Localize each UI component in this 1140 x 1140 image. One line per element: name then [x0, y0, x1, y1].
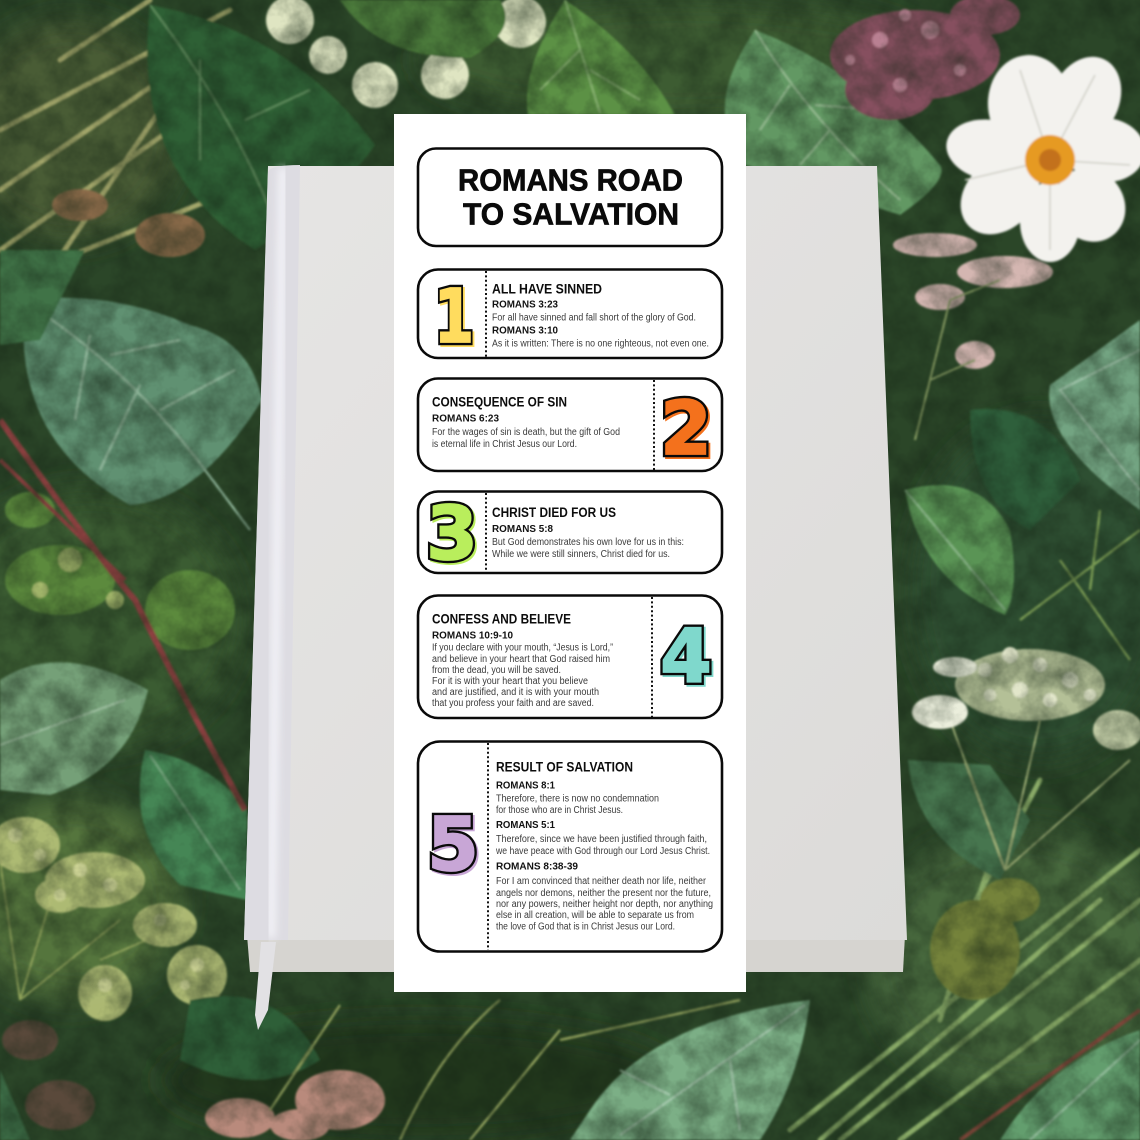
text block 4: If you declare with your mouth, “Jesus is Lord,” [432, 642, 613, 654]
umbels: lower left [0, 860, 170, 1000]
pale umbel top [266, 0, 546, 108]
text block 5: ROMANS 5:1 [496, 819, 555, 831]
text block 4: that you profess your faith and are saved. [432, 698, 594, 709]
text block 3: ROMANS 5:8 [492, 523, 553, 535]
panel 5: result of salvation [418, 742, 722, 952]
leaf: low-left [140, 750, 247, 900]
text block 4: For it is with your heart that you believe [432, 676, 588, 687]
icon: white daisy flower [941, 45, 1140, 262]
text block 3 [492, 505, 684, 560]
number 5: 5 [427, 802, 479, 888]
text block 2: CONSEQUENCE OF SIN [432, 394, 567, 410]
leaf: upper centre [527, 0, 675, 115]
leaf: bottom centre [570, 1000, 810, 1140]
text block 1: For all have sinned and fall short of the glory of God. [492, 312, 696, 324]
title text [458, 162, 683, 232]
panel 4: confess and believe [418, 596, 722, 718]
text block 4 [432, 612, 613, 709]
dark leaves beneath [180, 996, 320, 1080]
text block 5: angels nor demons, neither the present nor the future, [496, 888, 711, 899]
text block 1: ROMANS 3:23 [492, 298, 558, 310]
number 2: 2 [662, 388, 714, 474]
leaf: right [1049, 320, 1140, 510]
umbel: right white [950, 720, 1130, 870]
right olive sprays [930, 900, 1020, 1000]
panel 1: all have sinned [418, 270, 722, 362]
title box [418, 148, 722, 246]
text block 1: ALL HAVE SINNED [492, 282, 602, 296]
text block 4: from the dead, you will be saved. [432, 665, 561, 676]
number 3: 3 [428, 493, 480, 579]
number 4: 4 [662, 616, 714, 702]
text block 5: we have peace with God through our Lord Jesus Christ. [495, 846, 710, 857]
grass: lower right [790, 780, 1140, 1140]
pink sprays right [893, 233, 1053, 369]
text block 5: For I am convinced that neither death nor life, neither [496, 876, 707, 887]
text block 5: for those who are in Christ Jesus. [496, 805, 623, 816]
text block 1: As it is written: There is no one righteous, not even one. [492, 338, 709, 350]
text block 5: nor any powers, neither height nor depth, nor anything [496, 899, 713, 910]
book [244, 165, 907, 1030]
leaf dark top-left [147, 5, 375, 250]
number 1: 1 [436, 276, 476, 362]
text block 2: For the wages of sin is death, but the gift of God [432, 427, 620, 438]
upper-left grass [0, 0, 230, 330]
leaf: right middle [905, 485, 1014, 615]
number 1: 1 [434, 274, 474, 360]
number 4: 4 [660, 614, 712, 700]
text block 5: the love of God that is in Christ Jesus our Lord. [496, 922, 675, 932]
number 2: 2 [660, 386, 712, 472]
title text: ROMANS ROAD [458, 162, 683, 198]
text block 4: CONFESS AND BELIEVE [432, 612, 571, 626]
number 3: 3 [426, 491, 478, 577]
panel 2: consequence of sin [418, 378, 722, 474]
panel 3: christ died for us [418, 491, 722, 579]
red stem [0, 420, 245, 810]
number 5: 5 [429, 804, 481, 890]
number 5: 5 [427, 802, 479, 888]
card [394, 114, 746, 992]
text block 3: While we were still sinners, Christ died for us. [492, 549, 670, 560]
text block 4: and believe in your heart that God raised him [432, 654, 610, 665]
text block 2: ROMANS 6:23 [432, 412, 499, 424]
leaf: upper right [725, 30, 942, 215]
text block 1: ROMANS 3:10 [492, 324, 558, 336]
leaf: bottom right [1000, 1030, 1140, 1140]
text block 4: and are justified, and it is with your mouth [432, 687, 599, 698]
reddish sprigs upper-left [52, 189, 205, 257]
title text: TO SALVATION [463, 196, 679, 232]
brown lower left seed heads [2, 1020, 95, 1130]
pink lower cluster [205, 1070, 385, 1140]
mid-left leafy sprays [5, 492, 235, 650]
text block 2 [432, 394, 620, 450]
text block 5: ROMANS 8:1 [496, 780, 555, 792]
text block 5: Therefore, since we have been justified through faith, [496, 834, 707, 845]
leaf: mid-left pale [23, 298, 262, 505]
book cover [244, 166, 907, 940]
number 4: 4 [660, 614, 712, 700]
text block 5: ROMANS 8:38-39 [496, 860, 578, 872]
right sprigs [1020, 510, 1140, 660]
text block 5: Therefore, there is now no condemnation [496, 794, 659, 804]
number 3: 3 [426, 491, 478, 577]
text block 1 [492, 282, 709, 350]
text block 5: else in all creation, will be able to separate us from [496, 910, 694, 921]
text block 5: RESULT OF SALVATION [496, 760, 633, 774]
text block 3: But God demonstrates his own love for us in this: [492, 537, 684, 548]
book pages [247, 935, 905, 972]
text block 4: ROMANS 10:9-10 [432, 630, 513, 642]
book spine [244, 165, 300, 940]
text block 2: is eternal life in Christ Jesus our Lord. [432, 439, 577, 450]
pink flower cluster top right [830, 0, 1020, 120]
text block 5 [495, 760, 713, 932]
ribbon [255, 942, 276, 1030]
number 1: 1 [434, 274, 474, 360]
leaf: right lower [908, 760, 1030, 880]
leaf: far-left [0, 250, 85, 345]
number 2: 2 [660, 386, 712, 472]
text block 3: CHRIST DIED FOR US [492, 505, 616, 520]
